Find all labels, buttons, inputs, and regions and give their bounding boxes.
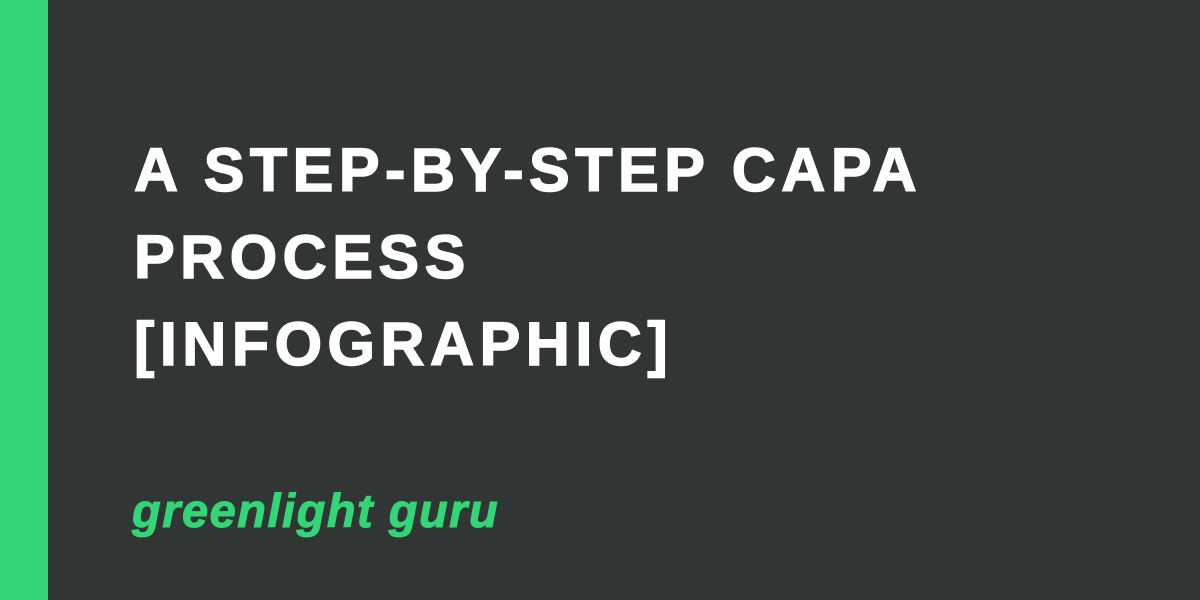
title: [134, 136, 922, 378]
logo: greenlight guru: greenlight guru: [132, 484, 499, 537]
title: PROCESS: [134, 223, 471, 291]
title: A STEP-BY-STEP CAPA: [134, 136, 922, 204]
accent bar: [0, 0, 48, 600]
title: [INFOGRAPHIC]: [134, 310, 673, 378]
